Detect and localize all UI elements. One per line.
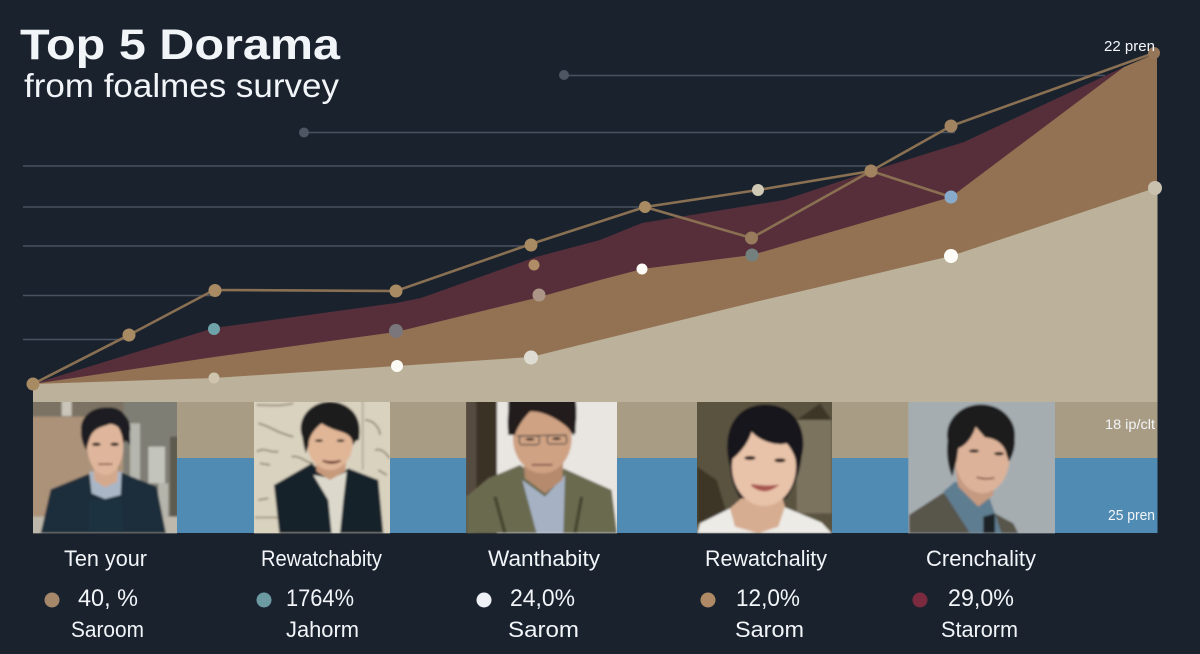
column 3 name: Sarom xyxy=(508,617,579,642)
column 5 name: Starorm xyxy=(941,617,1018,642)
column 2 name: Jahorm xyxy=(286,617,359,642)
portrait 4 xyxy=(697,402,832,534)
column 3: Wanthabity xyxy=(476,546,600,642)
column 3 value: 24,0% xyxy=(510,585,575,612)
column 5 legend dot xyxy=(912,592,928,608)
column 1: Ten your xyxy=(44,546,147,642)
band label: upper: 18 ip/clt xyxy=(1105,416,1155,432)
chart: stacked area with lines xyxy=(23,38,1162,402)
column 2 legend dot xyxy=(256,592,272,608)
portrait 5 xyxy=(905,400,1060,535)
column 4 name: Sarom xyxy=(735,617,804,642)
band label: lower: 25 pren xyxy=(1108,507,1155,524)
column 4 value: 12,0% xyxy=(736,585,800,612)
value label: top right: 22 pren xyxy=(1104,38,1155,55)
portrait 1 xyxy=(30,400,180,535)
column 4 heading: Rewatchality xyxy=(705,546,827,571)
band panel: tan and blue strip xyxy=(33,402,1158,533)
column 2 heading: Rewatchabity xyxy=(261,546,382,571)
grid lines xyxy=(23,76,1105,340)
column 3 heading: Wanthabity xyxy=(488,546,600,571)
column 1 heading: Ten your xyxy=(64,546,147,571)
line series xyxy=(33,53,1154,384)
column 5: Crenchality xyxy=(912,546,1036,642)
column 2: Rewatchabity xyxy=(256,546,382,642)
area: beige series xyxy=(33,188,1158,402)
column 3 legend dot xyxy=(476,592,492,608)
column 5 value: 29,0% xyxy=(948,585,1014,612)
column 5 heading: Crenchality xyxy=(926,546,1036,571)
area: brown series xyxy=(33,53,1157,402)
column 1 value: 40, % xyxy=(78,585,138,612)
portrait 2 xyxy=(254,402,390,534)
column 1 legend dot xyxy=(44,592,60,608)
area: maroon series xyxy=(33,53,1157,400)
portrait 3 xyxy=(465,400,620,535)
column 2 value: 1764% xyxy=(286,585,354,612)
column 1 name: Saroom xyxy=(71,617,144,642)
subtitle: from foalmes survey xyxy=(24,67,340,104)
data points xyxy=(26,47,1162,390)
column 4: Rewatchality xyxy=(700,546,827,642)
title: Top 5 Dorama xyxy=(20,21,341,69)
column 4 legend dot xyxy=(700,592,716,608)
